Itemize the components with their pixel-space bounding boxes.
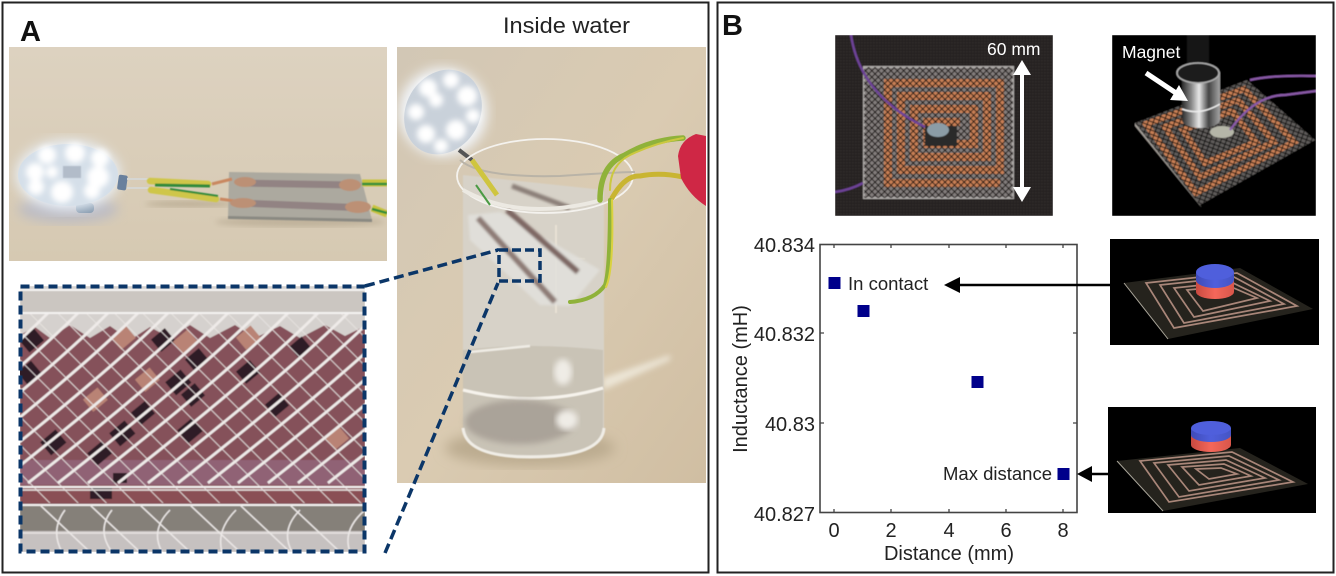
- arrow to magnet: [1146, 73, 1188, 101]
- dark and bright copper cells: [17, 327, 311, 499]
- photo: LED connected to sensor strip: [9, 47, 387, 261]
- arrow: in contact: [944, 277, 1111, 293]
- label in contact: In contact: [848, 273, 928, 294]
- inset dashed border: [20, 286, 364, 552]
- x tick labels: [828, 520, 1069, 542]
- x tick labels: 8: [1057, 520, 1069, 542]
- y tick labels: 40.83: [765, 414, 815, 436]
- dimension arrow: [1013, 60, 1031, 202]
- mesh lines: [20, 313, 365, 503]
- photo: beaker with immersed sensor: [389, 47, 706, 483]
- label 60 mm: 60 mm: [987, 39, 1040, 59]
- arrow: max distance: [1077, 466, 1109, 482]
- inset: mesh over copper close-up: [20, 286, 365, 552]
- y tick labels: 40.834: [754, 235, 815, 257]
- photo: magnet over coil: [1112, 35, 1316, 216]
- heading: inside water: Inside water: [503, 13, 630, 38]
- data points: [828, 277, 1070, 480]
- x tick labels: 6: [1000, 520, 1012, 542]
- photo: top view of coil, 60 mm: [835, 35, 1053, 216]
- label Magnet: Magnet: [1122, 42, 1181, 62]
- beaker rim: [457, 139, 635, 213]
- y tick labels: 40.832: [754, 324, 815, 346]
- scatter chart: inductance vs distance: [730, 235, 1077, 565]
- render: magnet at max distance: [1108, 407, 1316, 513]
- beaker body: [463, 175, 604, 457]
- immersed sensor strip: [468, 186, 600, 306]
- x tick labels: 4: [943, 520, 955, 542]
- y tick labels: 40.827: [754, 504, 815, 526]
- panel A: [0, 2, 708, 572]
- label B: B: [722, 10, 743, 42]
- y tick labels: [754, 235, 815, 526]
- render: magnet in contact: [1110, 239, 1319, 345]
- LED lamp: [397, 62, 494, 162]
- x axis title: Distance (mm): [884, 543, 1014, 565]
- x tick labels: 2: [885, 520, 897, 542]
- dashed connector lines: [365, 250, 498, 553]
- x tick labels: 0: [828, 520, 840, 542]
- red plug: [678, 134, 706, 206]
- green and yellow wires: [570, 138, 683, 302]
- panel B: [718, 2, 1334, 572]
- zoom callout box on beaker: [499, 250, 540, 281]
- label max distance: Max distance: [943, 463, 1052, 484]
- y axis title: Inductance (mH): [730, 305, 752, 453]
- label A: A: [20, 16, 41, 48]
